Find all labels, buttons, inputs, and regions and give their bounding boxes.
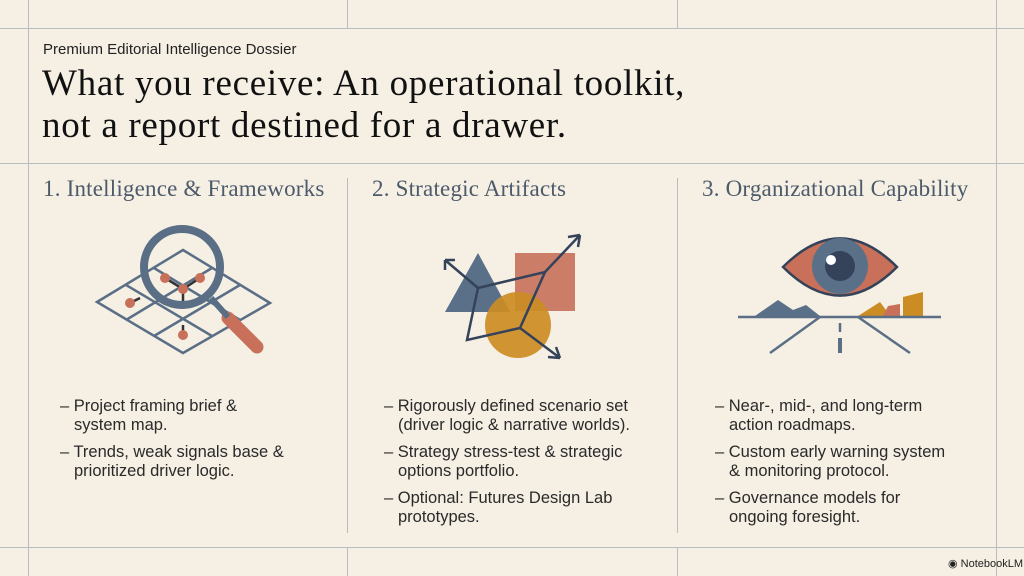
icon: eye over horizon road — [738, 237, 941, 354]
heading: column 1: 1. Intelligence & Frameworks — [43, 176, 325, 201]
icon: strategic shapes with arrows — [444, 234, 582, 360]
list: column 1: – Project framing brief & — [60, 397, 237, 415]
list: column 2: – Optional: Futures Design Lab prototypes. — [384, 489, 612, 526]
logo: ◉ NotebookLM — [948, 558, 1023, 570]
list: column 3 — [715, 397, 945, 526]
list: column 3: – Custom early warning system & monitoring protocol. — [715, 443, 945, 480]
list: column 2: – Strategy stress-test & strategic options portfolio. — [384, 443, 622, 480]
list: column 2: – Rigorously defined scenario set (driver logic & narrative worlds). — [384, 397, 630, 434]
list: column 3: – Near-, mid-, and long-term action roadmaps. — [715, 397, 922, 434]
heading: column 3: 3. Organizational Capability — [702, 176, 968, 201]
heading: column 2: 2. Strategic Artifacts — [372, 176, 566, 201]
list: column 3: – Governance models for ongoing foresight. — [715, 489, 900, 526]
list: column 2 — [384, 397, 630, 526]
subtitle: Premium Editorial Intelligence Dossier — [43, 41, 296, 58]
list: column 1: system map. — [74, 416, 168, 434]
list: column 1: – Trends, weak signals base & prioritized driver logic. — [60, 443, 284, 480]
title: What you receive: An operational toolkit, — [42, 63, 685, 104]
list: column 1 — [60, 397, 284, 480]
title — [42, 63, 685, 146]
title: not a report destined for a drawer. — [42, 105, 567, 146]
icon: magnifier over grid — [94, 225, 272, 354]
